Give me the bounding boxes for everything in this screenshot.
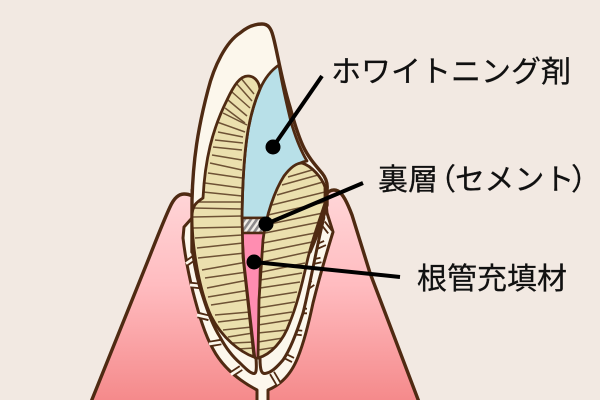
whitening agent chamber bbox=[242, 65, 307, 218]
gum bbox=[91, 190, 419, 400]
leader: root canal filling bbox=[246, 254, 400, 277]
periodontal band and root stem bbox=[183, 190, 333, 400]
label: root canal filling: 根管充填材 bbox=[417, 263, 567, 296]
crown enamel bbox=[192, 24, 327, 252]
left dentin bbox=[192, 76, 260, 357]
label: cement liner: 裏層 bbox=[378, 164, 438, 197]
label: cement liner: （ bbox=[426, 164, 456, 197]
cement liner bbox=[242, 218, 267, 233]
band ticks bbox=[186, 222, 331, 384]
right dentin bbox=[258, 163, 325, 358]
leader: whitening agent bbox=[266, 76, 322, 154]
label: whitening agent: ホワイトニング剤 bbox=[331, 56, 571, 89]
inner root line bbox=[192, 217, 324, 374]
leader: cement liner bbox=[258, 183, 363, 232]
label: cement liner: セメント bbox=[455, 164, 574, 197]
tooth cross-section infographic bbox=[90, 22, 580, 400]
root canal filling bbox=[242, 233, 265, 358]
